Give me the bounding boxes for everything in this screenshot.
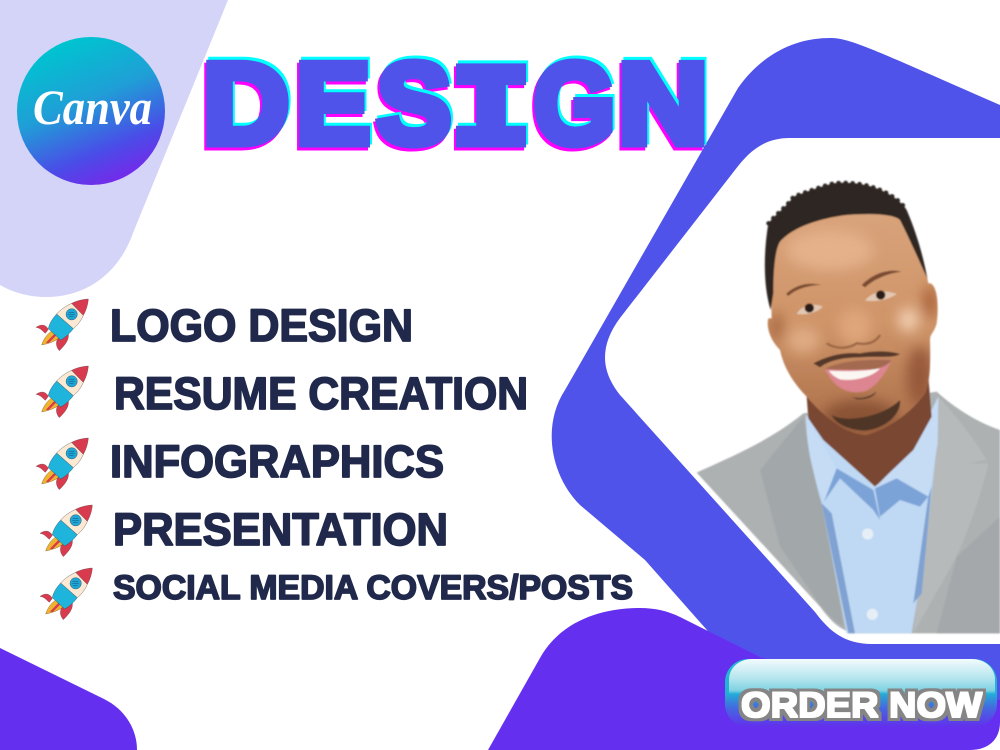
panel: white photo frame xyxy=(605,138,1000,644)
shirt xyxy=(806,400,938,633)
title: DESIGN xyxy=(203,41,708,178)
text: social media: SOCIAL MEDIA COVERS/POSTS xyxy=(113,569,633,607)
button: order now xyxy=(725,659,997,727)
title: DESIGN: G xyxy=(534,41,615,168)
text: resume creation: RESUME CREATION xyxy=(114,368,528,419)
nose xyxy=(827,335,880,348)
background panel: lavender shape xyxy=(0,0,228,297)
icon: Canva logo: Canva xyxy=(33,79,152,135)
hair xyxy=(765,183,927,310)
text: presentation: PRESENTATION xyxy=(113,504,448,555)
portrait photo xyxy=(697,183,1000,633)
eyebrows xyxy=(786,271,902,296)
title: DESIGN: S xyxy=(377,41,451,168)
title: DESIGN: I xyxy=(451,49,531,178)
title: DESIGN: N xyxy=(618,41,708,168)
jacket xyxy=(697,392,1000,633)
title: DESIGN: D xyxy=(203,41,289,168)
text: infographics: INFOGRAPHICS xyxy=(110,436,444,487)
background panel: purple shape xyxy=(488,608,1000,750)
icon: rocket 1 xyxy=(36,299,88,351)
button label: ORDER NOW xyxy=(741,686,982,725)
collar xyxy=(806,397,938,502)
icon: rocket 4 xyxy=(40,505,92,557)
list: services xyxy=(36,299,633,620)
icon: Canva logo xyxy=(17,37,165,185)
mouth xyxy=(825,359,892,392)
button gloss xyxy=(729,659,995,694)
skin highlights xyxy=(771,230,936,433)
neck xyxy=(807,377,932,487)
goatee xyxy=(832,400,900,431)
shirt buttons xyxy=(862,528,878,620)
moustache xyxy=(813,351,900,367)
icon: rocket 3 xyxy=(36,438,88,490)
background panel: purple corner xyxy=(0,648,137,750)
eyes xyxy=(797,290,897,314)
text: logo design: LOGO DESIGN xyxy=(110,300,413,351)
background panel: blue shape xyxy=(552,38,1000,720)
face xyxy=(768,209,938,435)
icon: rocket 5 xyxy=(40,568,92,620)
title: DESIGN: E xyxy=(296,41,370,168)
icon: rocket 2 xyxy=(36,366,88,418)
